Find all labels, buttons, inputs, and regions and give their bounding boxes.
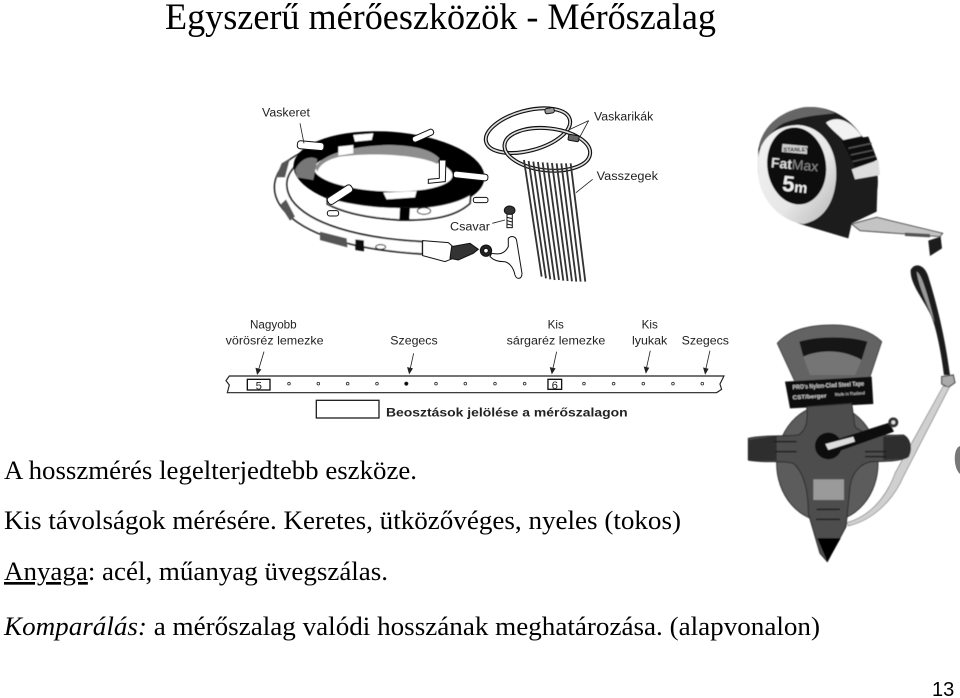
steel pins	[524, 160, 585, 282]
crank arm	[824, 417, 898, 453]
frame grips	[748, 436, 910, 519]
handle inner	[803, 352, 862, 375]
crank hub	[815, 433, 842, 459]
brand text: STANLEY	[783, 148, 810, 154]
handle slot	[799, 337, 867, 360]
label: Kis sárgaréz lemezke: Kis	[548, 319, 564, 332]
label band: CST/berger	[792, 393, 828, 401]
frame pegs	[297, 128, 488, 216]
black label disc	[762, 124, 831, 208]
tape strip	[226, 376, 724, 393]
illustration: tape marking strip	[226, 319, 729, 419]
lock ribs	[848, 143, 876, 162]
case highlight	[826, 119, 862, 140]
strap	[847, 265, 955, 526]
label band: PRO's Nylon-Clad Steel Tape	[792, 381, 865, 391]
label: Szegecs right: Szegecs	[682, 334, 729, 347]
strip holes and rivets	[288, 382, 704, 385]
caption box	[316, 400, 379, 418]
plate 5: 5	[256, 380, 262, 392]
label: Vaskeret: Vaskeret	[262, 106, 311, 120]
case top grey rim	[759, 107, 835, 152]
photo: open-reel tape	[748, 265, 955, 562]
label: Nagyobb vörösréz lemezke: vörösréz lemezke	[226, 334, 324, 347]
face bezel	[758, 125, 836, 224]
label: Szegecs: Szegecs	[390, 334, 438, 347]
carrying handle	[777, 325, 882, 382]
plate 5	[247, 379, 270, 392]
lock lower trim	[852, 160, 880, 179]
reel drum	[777, 405, 878, 522]
label: Kis sárgaréz lemezke: sárgaréz lemezke	[507, 334, 605, 347]
body text line 2: Kis távolságok mérésére. Keretes, ütközővéges, nyeles (tokos)	[4, 505, 681, 535]
arrows to strip	[256, 351, 710, 374]
tape end with T-handle	[423, 237, 522, 278]
screw	[504, 206, 515, 228]
brand text: 5m	[781, 171, 809, 198]
brand text	[770, 144, 819, 198]
label band: Made in Thailand	[835, 390, 865, 397]
label: Kis lyukak: Kis	[642, 319, 658, 332]
label: Vaskarikák: Vaskarikák	[594, 109, 654, 123]
label: Kis lyukak: lyukak	[632, 334, 667, 347]
label band	[785, 377, 873, 408]
caption: Beosztások jelölése a mérőszalagon	[386, 405, 628, 419]
plate 6	[548, 379, 562, 392]
slide lock	[842, 137, 877, 167]
body text line 3: Anyaga: acél, műanyag üvegszálas.	[4, 556, 388, 586]
brand text: FatMax	[770, 154, 819, 174]
label: Vasszegek: Vasszegek	[597, 169, 659, 183]
ring frame	[291, 125, 487, 220]
body text line 4: Komparálás: a mérőszalag valódi hosszának meghatározása. (alapvonalon)	[3, 611, 820, 641]
photo: FatMax pocket tape	[758, 107, 943, 256]
partial reel at right edge	[955, 446, 960, 474]
label leader lines	[300, 121, 593, 223]
steel rings	[481, 100, 592, 175]
plate 6: 6	[552, 380, 558, 392]
illustration: steel ring tape with pins	[262, 100, 659, 282]
label: Nagyobb vörösréz lemezke: Nagyobb	[250, 319, 297, 332]
label: Csavar: Csavar	[450, 220, 490, 234]
pointed tip	[817, 538, 841, 562]
blade	[852, 217, 943, 256]
info plate	[813, 479, 844, 500]
cross-shaped frame	[748, 403, 910, 562]
body text line 1: A hosszmérés legelterjedtebb eszköze.	[4, 455, 417, 485]
tape band loop	[275, 154, 423, 254]
case	[758, 107, 878, 238]
